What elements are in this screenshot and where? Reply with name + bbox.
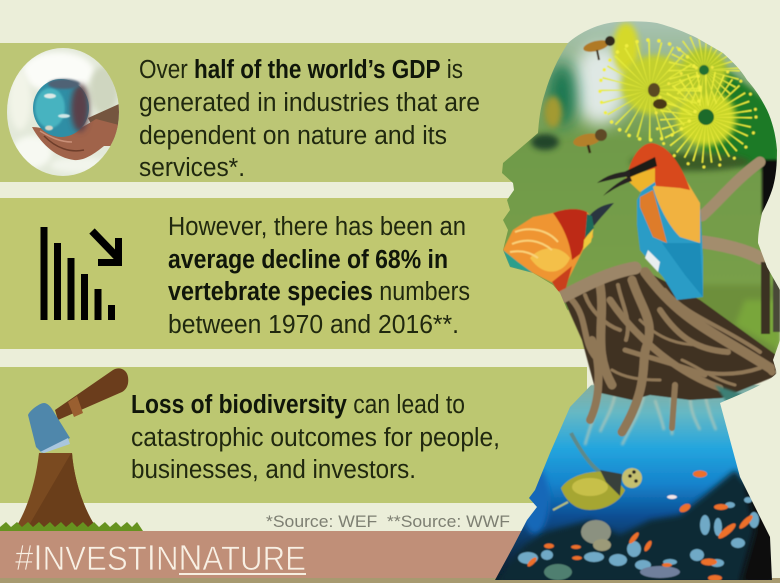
grass: [0, 522, 143, 531]
roots: [562, 268, 776, 432]
panel: GDP fact: [0, 43, 572, 182]
axe handle: [55, 368, 128, 420]
icon: hand holding globe: [7, 48, 119, 176]
forest and sky background: [495, 20, 780, 310]
bird: left bee-eater: [503, 203, 614, 292]
text: species decline statement: However, there has been an: [168, 213, 466, 241]
text: GDP statement: [139, 56, 480, 182]
text: species decline statement: [168, 213, 470, 339]
text: biodiversity loss statement: businesses, and investors.: [131, 456, 416, 484]
panel: species decline: [0, 198, 590, 349]
text: biodiversity loss statement: catastrophic outcomes for people,: [131, 424, 500, 452]
panel: biodiversity loss: [0, 367, 587, 503]
lower branch under birds: [560, 268, 635, 298]
text: biodiversity loss statement: [131, 391, 500, 484]
source note: *Source: WEF **Source: WWF: [266, 512, 510, 531]
text: GDP statement: services*.: [139, 154, 245, 182]
illustration: head silhouette of nature: [480, 20, 780, 583]
stump: [16, 453, 96, 527]
flowers: [600, 23, 756, 167]
hashtag: #INVESTINNATURE: [15, 537, 306, 578]
text: biodiversity loss statement: Loss of biodiversity can lead to: [131, 391, 465, 419]
ocean: [480, 385, 780, 583]
coral reef: [495, 470, 775, 583]
bees: [572, 36, 615, 153]
icon: axe in tree stump: [0, 368, 143, 531]
branches: [702, 162, 760, 258]
icon: declining bar chart with arrow: [40, 227, 122, 320]
axe blade: [28, 403, 70, 453]
text: species decline statement: between 1970 and 2016**.: [168, 311, 459, 339]
orange fish: [526, 470, 754, 581]
text: GDP statement: dependent on nature and its: [139, 122, 447, 150]
text: species decline statement: average decline of 68% in: [168, 246, 448, 274]
right foliage and trunk: [697, 262, 780, 355]
bird: right bee-eater: [597, 143, 703, 300]
text: GDP statement: generated in industries that are: [139, 89, 480, 117]
sea turtle: [553, 433, 642, 510]
text: GDP statement: Over half of the world’s GDP is: [139, 56, 463, 84]
footer banner: [0, 531, 780, 583]
text: species decline statement: vertebrate species numbers: [168, 278, 470, 306]
